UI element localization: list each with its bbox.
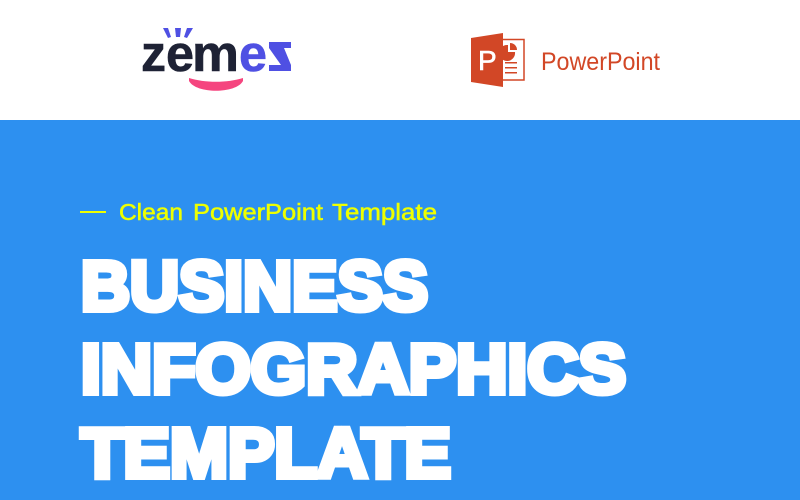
subtitle: PowerPoint xyxy=(193,199,324,225)
icon: logo sparks xyxy=(163,28,193,38)
title xyxy=(81,247,626,492)
icon: PowerPoint document: P xyxy=(478,45,497,76)
title line: TEMPLATE: TEMPLATE xyxy=(81,414,451,492)
icon: mirrored z xyxy=(269,42,291,71)
subtitle xyxy=(119,199,437,225)
text: PowerPoint: PowerPoint xyxy=(541,48,660,76)
wordmark: accent e: e xyxy=(239,25,267,82)
wordmark: dark letters: e xyxy=(166,25,194,82)
subtitle: Clean xyxy=(119,199,183,225)
divider: yellow dash xyxy=(80,211,106,213)
wordmark: dark letters: m xyxy=(192,25,239,82)
icon: PowerPoint document xyxy=(471,33,524,87)
logo: PowerPoint xyxy=(471,33,660,87)
logo: zemez xyxy=(141,25,291,91)
header: logo bar xyxy=(0,0,800,120)
title line: INFOGRAPHICS: INFOGRAPHICS xyxy=(81,330,626,408)
subtitle: Template xyxy=(332,199,437,225)
wordmark: dark letters xyxy=(141,25,239,82)
wordmark: dark letters: z xyxy=(141,25,166,82)
panel: blue background xyxy=(0,120,800,500)
icon: pink smile xyxy=(189,78,243,91)
title line: BUSINESS: BUSINESS xyxy=(81,247,428,325)
